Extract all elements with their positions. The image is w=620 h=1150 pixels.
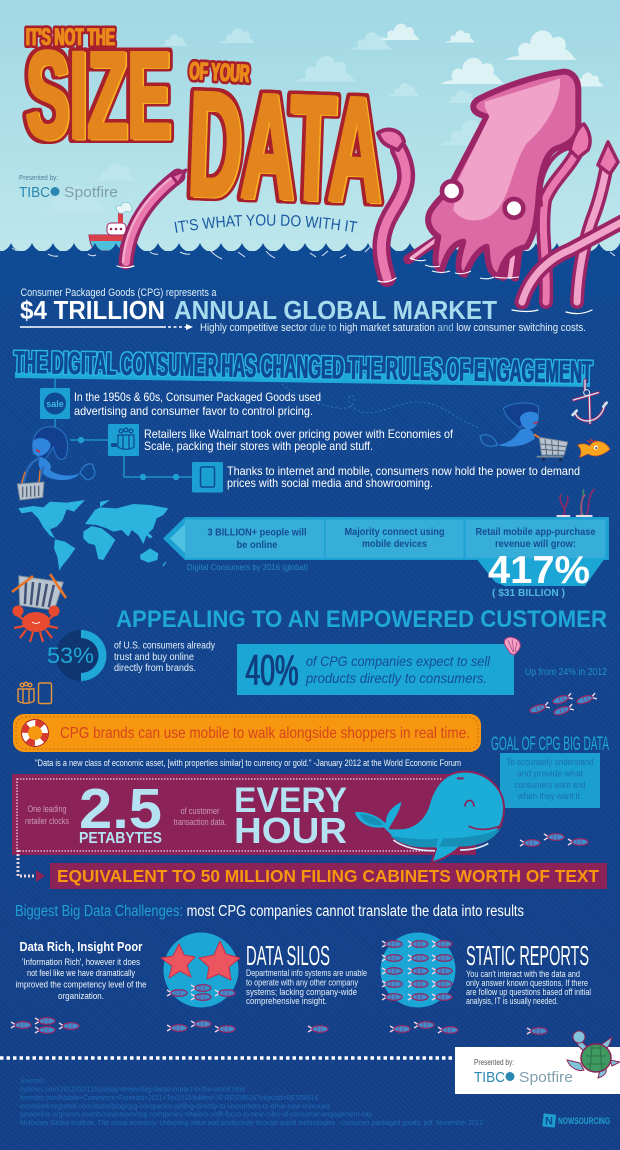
icon: sale badge: sale	[46, 399, 64, 409]
squid lower arms	[408, 238, 518, 277]
donut chart 53%: 53%	[47, 643, 94, 668]
step 1	[40, 388, 321, 419]
data silos text: comprehensive insight.	[246, 996, 327, 1006]
title line: DATA: DATA	[186, 59, 386, 234]
arrow	[20, 324, 193, 330]
sources	[20, 1076, 483, 1127]
40% panel: 40%	[246, 646, 299, 695]
data silos text: DATA SILOS	[246, 940, 330, 971]
fish school upper right	[529, 693, 597, 716]
static reports text: are follow up questions based off initial	[466, 987, 591, 997]
icon: lifebuoy	[22, 720, 48, 746]
icon: sale badge	[40, 388, 70, 419]
presented by logo top: Presented by:	[19, 173, 58, 182]
orange fish	[577, 439, 610, 457]
title line: IT'S NOT THE: IT'S NOT THE	[26, 24, 114, 51]
presented by logo top: Spotfire	[64, 184, 118, 201]
data rich body: not feel like we have dramatically	[27, 968, 135, 979]
$31 billion: ( $31 BILLION )	[492, 587, 565, 599]
417% callout: 417%	[488, 549, 590, 592]
challenges heading: Biggest Big Data Challenges: most CPG companies cannot translate the data into results	[15, 903, 524, 920]
every hour: HOUR	[234, 810, 347, 851]
data silos text: to operate with any other company	[246, 978, 358, 988]
static reports text	[466, 940, 591, 1006]
step 2 text: Scale, packing their stores with people and stuff.	[144, 439, 373, 453]
sources: excelsiorintegrated.com/about/blog/cpg-companies-selling-directly-to-consumers-to-drive-new-revenues	[20, 1102, 330, 1110]
market description: Highly competitive sector due to high market saturation and low consumer switching costs.	[200, 322, 586, 334]
arrow to equivalent band	[18, 850, 45, 882]
anchor	[573, 380, 607, 423]
step 3 text	[227, 464, 580, 490]
53% text: directly from brands.	[114, 662, 196, 674]
53% text	[114, 640, 216, 674]
equivalent band: EQUIVALENT TO 50 MILLION FILING CABINETS WORTH OF TEXT	[57, 866, 599, 886]
connectors timeline	[55, 378, 192, 480]
of customer: of customer	[180, 806, 220, 816]
stat: mobile: mobile devices	[362, 538, 427, 550]
one leading	[25, 804, 69, 826]
step 1 text: advertising and consumer favor to control pricing.	[74, 404, 313, 418]
title line: IT'S NOT THE: IT'S NOT THE	[26, 24, 116, 51]
title line: OF YOUR: OF YOUR	[188, 57, 249, 88]
data rich body: organization.	[58, 991, 104, 1002]
title line: DATA: DATA	[185, 59, 385, 234]
fish trio right	[520, 834, 588, 846]
title line: OF YOUR: OF YOUR	[190, 57, 251, 88]
step 2	[108, 424, 454, 456]
title line: DATA: DATA	[188, 60, 388, 235]
stat: mobile: Majority connect using	[344, 526, 444, 538]
fish grid	[382, 941, 452, 1000]
starfish	[161, 941, 240, 980]
orange icons	[18, 682, 52, 704]
stat: 3 billion: 3 BILLION+ people will	[208, 526, 307, 538]
squid eyes	[442, 181, 523, 218]
squid waterline foam	[410, 258, 519, 279]
icon: shoppers	[108, 424, 139, 456]
sources: forrester.com/Mobile+Commerce+Forecast+2011+To+2016/fulltext/-/E-RES58616?objectid=RES58616	[20, 1093, 318, 1102]
step 1 text	[74, 390, 321, 418]
stat: retail growth: Retail mobile app-purchase	[476, 526, 596, 538]
stat: 3 billion	[185, 520, 324, 558]
title line: DATA	[183, 59, 389, 235]
one leading: One leading	[28, 804, 66, 814]
title line: OF YOUR: OF YOUR	[189, 57, 251, 88]
world map	[18, 500, 168, 571]
presented by box	[455, 1047, 620, 1094]
fish in silo	[167, 985, 235, 1000]
goal box: when they want it.	[517, 791, 582, 801]
$4 trillion: $4 TRILLION	[20, 295, 165, 325]
sources: nytimes.com/2012/02/12/sunday-review/big-datas-impact-in-the-world.html	[20, 1084, 245, 1094]
static reports text: You can't interact with the data and	[466, 969, 580, 979]
basket	[17, 482, 44, 500]
step 3 text: Thanks to internet and mobile, consumers now hold the power to demand	[227, 464, 580, 478]
right mermaid with cart	[480, 403, 568, 462]
step 2 text: Retailers like Walmart took over pricing power with Economies of	[144, 427, 454, 441]
tentacle beside DATA	[378, 130, 406, 282]
title line: OF YOUR	[188, 57, 251, 88]
squid body	[428, 72, 578, 277]
title line: SIZE: SIZE	[23, 27, 168, 165]
dashed swim path	[282, 384, 480, 428]
hero: sky and clouds	[0, 0, 620, 252]
presented by box: Spotfire	[519, 1069, 573, 1086]
sea waves	[0, 242, 620, 295]
goal of big data	[491, 734, 609, 808]
data silos text	[246, 940, 367, 1006]
quote: "Data is a new class of economic asset, [with properties similar] to currency or gold." -January 2012 at the World Economic Forum	[35, 758, 461, 768]
seashell	[504, 637, 520, 655]
squid right tentacles	[512, 124, 620, 314]
stat: mobile	[326, 520, 464, 558]
every hour	[234, 781, 347, 851]
title line: DATA: DATA	[186, 59, 386, 234]
petabytes: PETABYTES	[79, 830, 162, 847]
donut chart 53%	[47, 630, 107, 681]
left mermaid with basket	[17, 427, 95, 500]
of customer: transaction data.	[174, 817, 226, 827]
callout text: CPG brands can use mobile to walk alongside shoppers in real time.	[60, 725, 470, 742]
circle: data silos	[161, 932, 240, 1008]
53% text: trust and buy online	[114, 651, 194, 663]
title line: SIZE: SIZE	[29, 27, 174, 165]
left tentacle	[117, 170, 186, 268]
53% text: of U.S. consumers already	[114, 640, 216, 652]
whale	[353, 772, 504, 862]
market intro line: Consumer Packaged Goods (CPG) represents a	[20, 287, 217, 299]
turtle	[567, 1031, 620, 1078]
stats arrow panel	[163, 517, 609, 560]
data rich body: improved the competency level of the	[16, 980, 146, 990]
40% panel	[237, 644, 514, 695]
presented by logo top	[19, 173, 118, 201]
40% panel: products directly to consumers.	[305, 670, 487, 686]
subtitle: IT'S WHAT YOU DO WITH IT	[174, 214, 358, 233]
presented by box: TIBC	[474, 1069, 505, 1086]
presented by logo top: TIBC	[19, 184, 50, 201]
cart	[539, 437, 568, 455]
title line: OF YOUR: OF YOUR	[188, 57, 250, 88]
data silos text: systems; lacking company-wide	[246, 987, 357, 997]
step 3 text: prices with social media and showrooming.	[227, 476, 433, 490]
data rich body	[16, 957, 146, 1002]
up from 24%: Up from 24% in 2012	[525, 667, 607, 678]
step 2 text	[144, 427, 454, 453]
squid	[408, 72, 578, 277]
goal box: consumers want and	[514, 780, 586, 790]
market statement	[20, 287, 586, 334]
of customer	[174, 806, 226, 827]
title line: SIZE: SIZE	[26, 27, 171, 165]
stat: retail growth: revenue will grow:	[495, 538, 576, 550]
stat: retail growth	[466, 520, 606, 558]
2.5: 2.5	[79, 777, 162, 841]
every hour: EVERY	[234, 781, 347, 820]
step 3	[192, 462, 580, 492]
seaweed	[557, 489, 594, 516]
goal box	[500, 753, 600, 808]
title line: IT'S NOT THE: IT'S NOT THE	[25, 24, 114, 51]
title line: IT'S NOT THE	[25, 24, 116, 51]
title: It's not the size of your data	[23, 24, 389, 235]
map caption: Digital Consumers by 2016 (global)	[187, 562, 308, 572]
title line: SIZE: SIZE	[26, 27, 171, 165]
text: DATA	[189, 59, 389, 234]
data silos text: Departmental info systems are unable	[246, 968, 367, 978]
sources: gmaonline.org/news-events/newsroom/cpg-companies-retailers-shift-focus-to-new-rules-of-consumer-engagement-say	[20, 1110, 372, 1118]
data rich heading: Data Rich, Insight Poor	[20, 939, 142, 954]
417% callout	[476, 549, 605, 599]
40% panel: of CPG companies expect to sell	[306, 653, 491, 669]
squid highlight	[453, 78, 560, 220]
title line: DATA: DATA	[183, 59, 383, 234]
data rich body: 'Information Rich', however it does	[22, 957, 140, 968]
boat	[89, 202, 132, 251]
nowsourcing logo	[542, 1113, 610, 1128]
title line: SIZE	[23, 27, 174, 166]
static reports text: only answer known questions. If there	[466, 978, 588, 988]
fish row	[11, 1018, 547, 1034]
title line: IT'S NOT THE: IT'S NOT THE	[27, 24, 116, 51]
title line: SIZE: SIZE	[25, 27, 170, 165]
sources: Sources:	[20, 1076, 45, 1085]
static reports text: analysis, IT is usually needed.	[466, 996, 558, 1006]
sources: McKinsey Global Institute, The social economy: Unlocking value and productivity through social technologies - consumer packaged goods, pdf. November 2012	[20, 1118, 483, 1127]
circle: static reports	[380, 932, 456, 1008]
step 1 text: In the 1950s & 60s, Consumer Packaged Goods used	[74, 390, 321, 404]
40% panel: 40%	[245, 646, 298, 695]
nowsourcing logo: N	[545, 1116, 553, 1128]
goal box: To accurately understand	[506, 757, 594, 767]
crab holding basket	[12, 574, 66, 642]
goal box: and provide what	[517, 768, 583, 778]
stat: 3 billion: be online	[236, 539, 278, 551]
orange callout banner	[13, 714, 481, 752]
one leading: retailer clocks	[25, 816, 69, 826]
title line: SIZE: SIZE	[28, 28, 173, 166]
presented by box: Presented by:	[474, 1058, 514, 1067]
icon: tablet	[192, 462, 223, 492]
petabytes panel	[12, 774, 487, 855]
data rich insight poor	[16, 939, 146, 1002]
annual global market: ANNUAL GLOBAL MARKET	[174, 295, 497, 325]
